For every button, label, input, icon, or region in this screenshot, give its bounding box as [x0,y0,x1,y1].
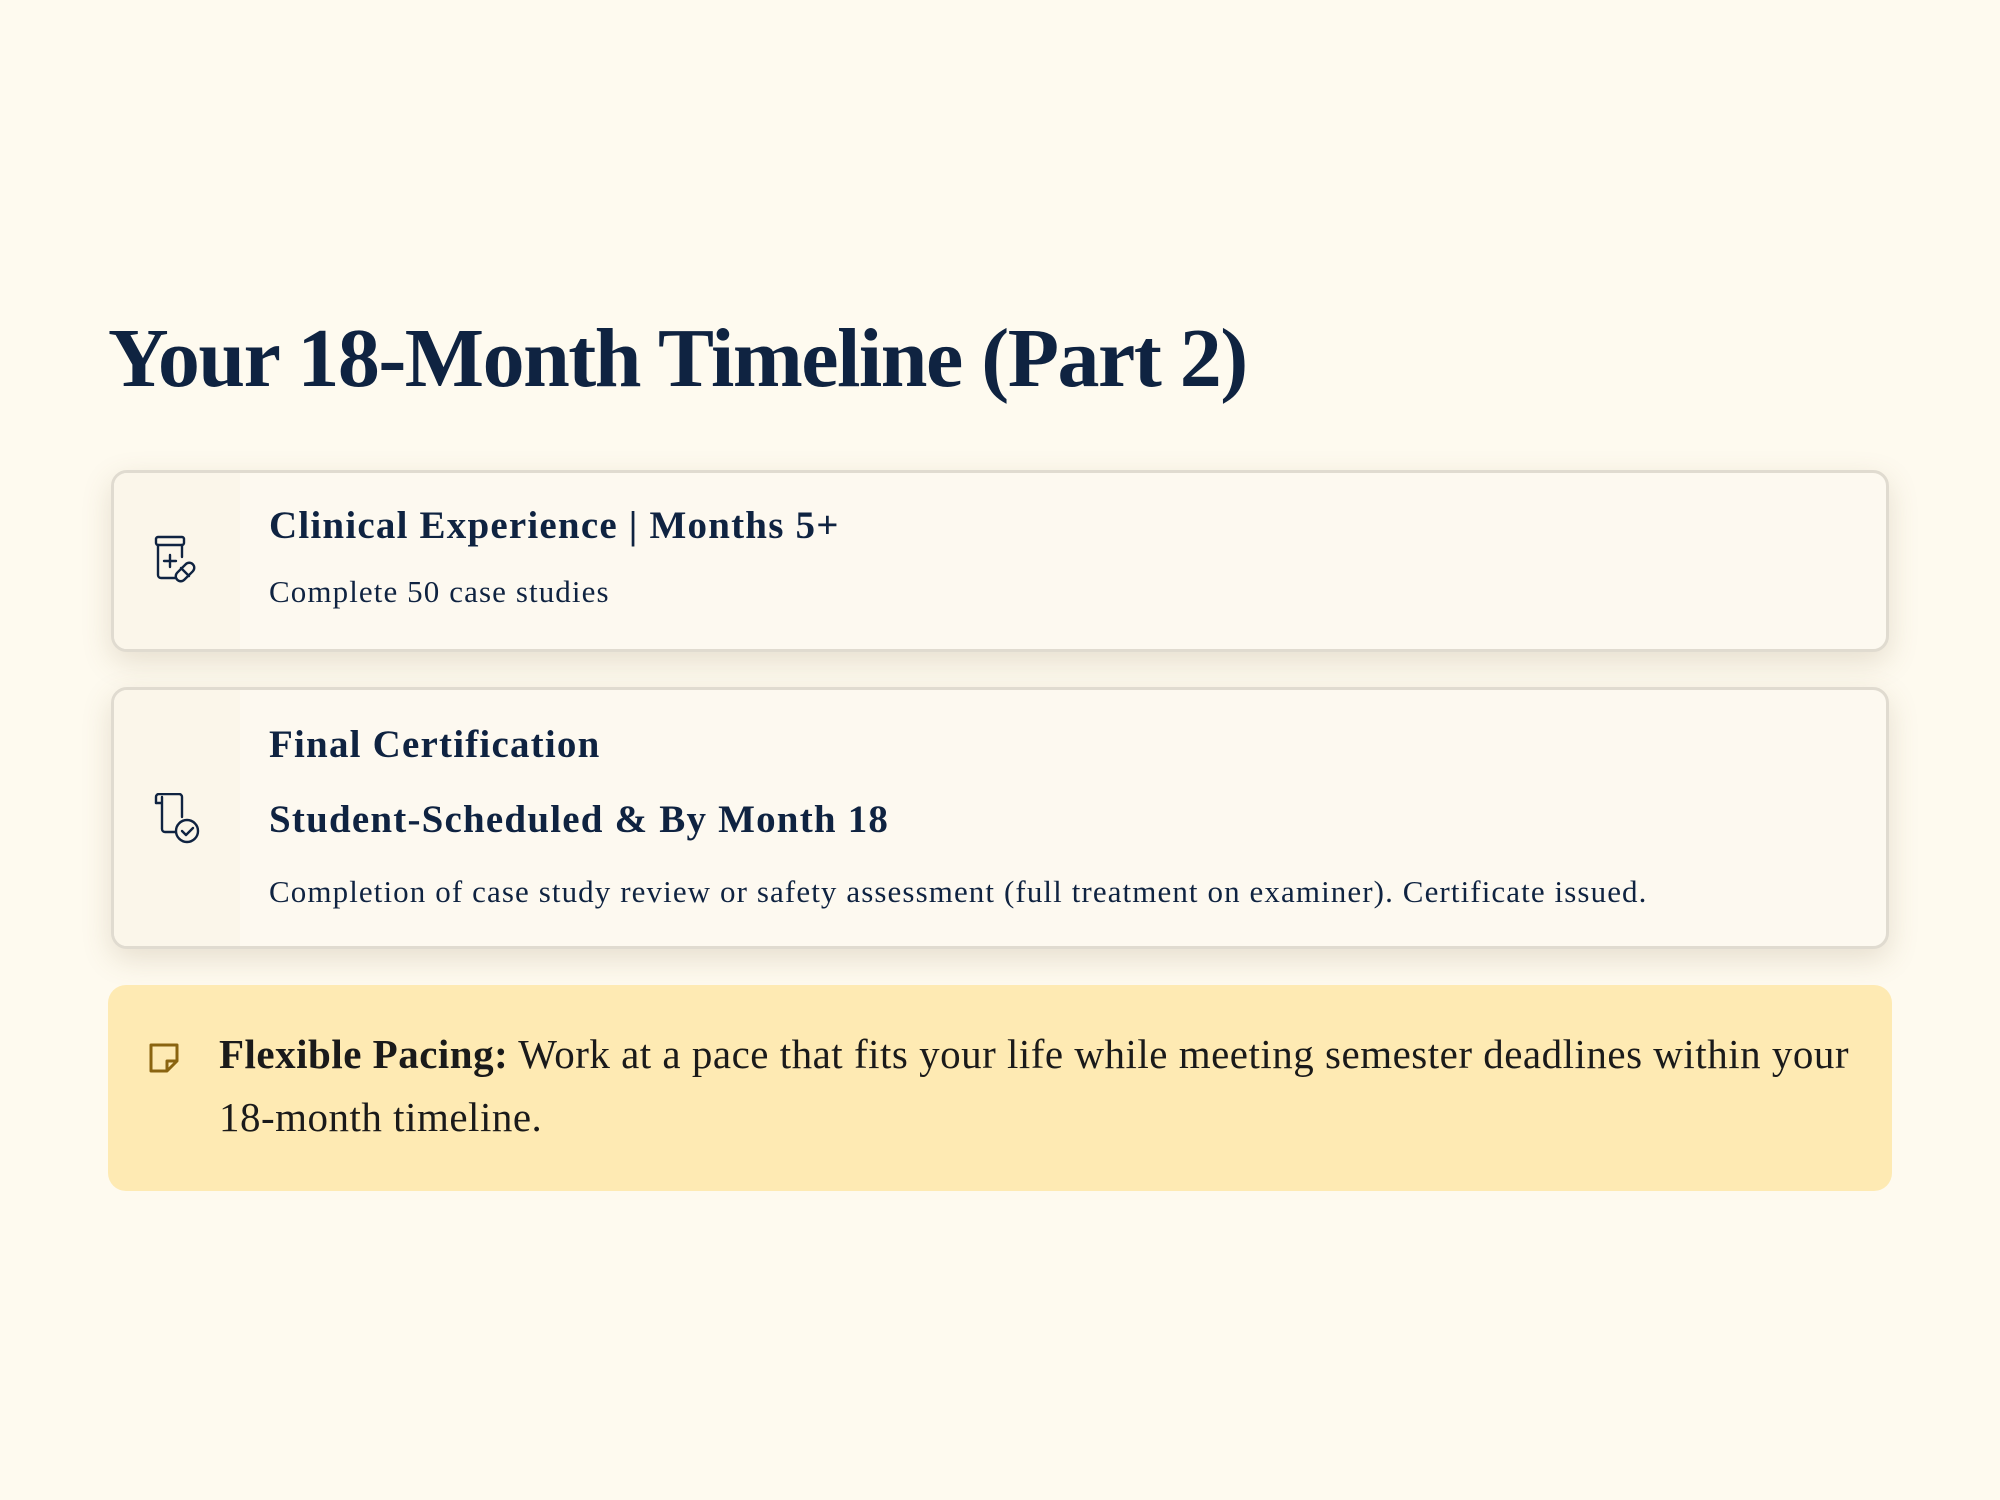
title: Your 18-Month Timeline (Part 2) [108,312,1247,405]
heading: Clinical Experience | Months 5+ [269,504,840,547]
heading line 1: Final Certification [269,723,600,766]
text: Complete 50 case studies [269,574,610,609]
callout text: Flexible Pacing: Work at a pace that fits your life while meeting semester deadlines within your [219,1031,1849,1077]
callout text: 18-month timeline. [219,1094,542,1140]
heading line 2: Student-Scheduled & By Month 18 [269,798,889,841]
panel: final certification [111,687,1889,949]
icon: scroll with check [154,793,200,844]
panel: clinical experience [111,470,1889,652]
callout text [219,1031,1849,1140]
text: Completion of case study review or safety assessment (full treatment on examiner). Certificate issued. [269,874,1648,909]
callout: flexible pacing [108,985,1892,1191]
icon: medicine bottle [154,536,196,582]
icon: note [150,1044,178,1072]
